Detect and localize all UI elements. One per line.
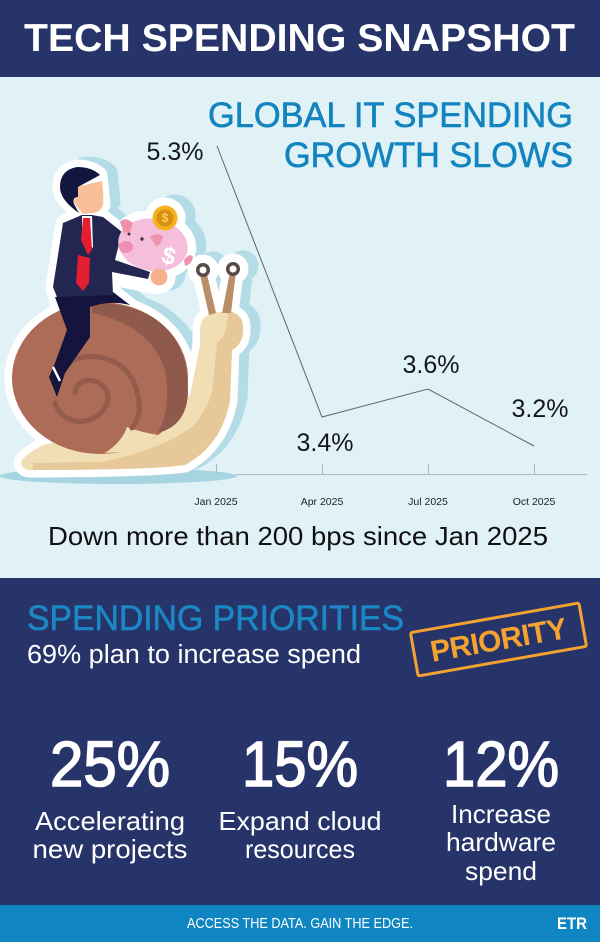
stat: 12% increase hardware spend: hardware	[446, 827, 556, 857]
footer band	[0, 905, 600, 942]
line chart: Oct 2025	[513, 496, 555, 508]
subheading: 69% plan to increase spend	[27, 641, 361, 669]
heading: global IT spending growth slows: GROWTH SLOWS	[284, 136, 573, 175]
illustration: businessman with piggy bank riding a snail	[0, 164, 253, 484]
stamp: priority	[410, 603, 587, 676]
line chart: 3.2%	[512, 395, 568, 423]
piggy bank	[114, 206, 193, 286]
stat: 15% expand cloud resources: Expand cloud	[218, 806, 382, 836]
line chart: 5.3%	[147, 138, 203, 166]
line chart: Jul 2025	[408, 496, 448, 508]
stat: 25% accelerating new projects: Accelerating	[35, 806, 185, 836]
line chart: 3.6%	[403, 351, 459, 379]
panel: spending priorities	[0, 578, 600, 905]
stamp: priority: PRIORITY	[428, 612, 569, 669]
header banner	[0, 0, 600, 77]
tagline: ACCESS THE DATA. GAIN THE EDGE.	[187, 916, 413, 932]
stat: 12% increase hardware spend	[443, 728, 559, 886]
stat: 25% accelerating new projects	[32, 728, 188, 864]
line chart: Apr 2025	[301, 496, 343, 508]
heading: global IT spending growth slows: GLOBAL IT SPENDING	[208, 96, 573, 135]
stat: 15% expand cloud resources: resources	[245, 834, 355, 864]
chart caption: Down more than 200 bps since Jan 2025	[48, 521, 548, 551]
line chart	[147, 138, 587, 508]
logo: ETR: ETR	[557, 914, 587, 933]
stat: 12% increase hardware spend: spend	[465, 856, 537, 886]
stat: 15% expand cloud resources: 15%	[242, 728, 358, 800]
stat: 12% increase hardware spend: Increase	[451, 799, 551, 829]
heading: spending priorities: SPENDING PRIORITIES	[27, 599, 404, 638]
line chart: Jan 2025	[194, 496, 238, 508]
snail antennae	[200, 270, 216, 315]
piggy bank: $	[159, 242, 179, 271]
line chart: 3.4%	[297, 429, 353, 457]
stat: 12% increase hardware spend: 12%	[443, 728, 559, 800]
snail body	[21, 312, 243, 470]
stat: 15% expand cloud resources	[218, 728, 382, 864]
businessman	[49, 167, 150, 397]
stat: 25% accelerating new projects: new projects	[32, 834, 188, 864]
title: TECH SPENDING SNAPSHOT	[24, 17, 575, 60]
piggy bank: $	[162, 211, 169, 225]
panel: global IT spending growth	[0, 77, 600, 578]
snail shell	[12, 302, 188, 454]
heading: global IT spending growth slows	[208, 96, 573, 175]
stat: 25% accelerating new projects: 25%	[50, 728, 170, 800]
